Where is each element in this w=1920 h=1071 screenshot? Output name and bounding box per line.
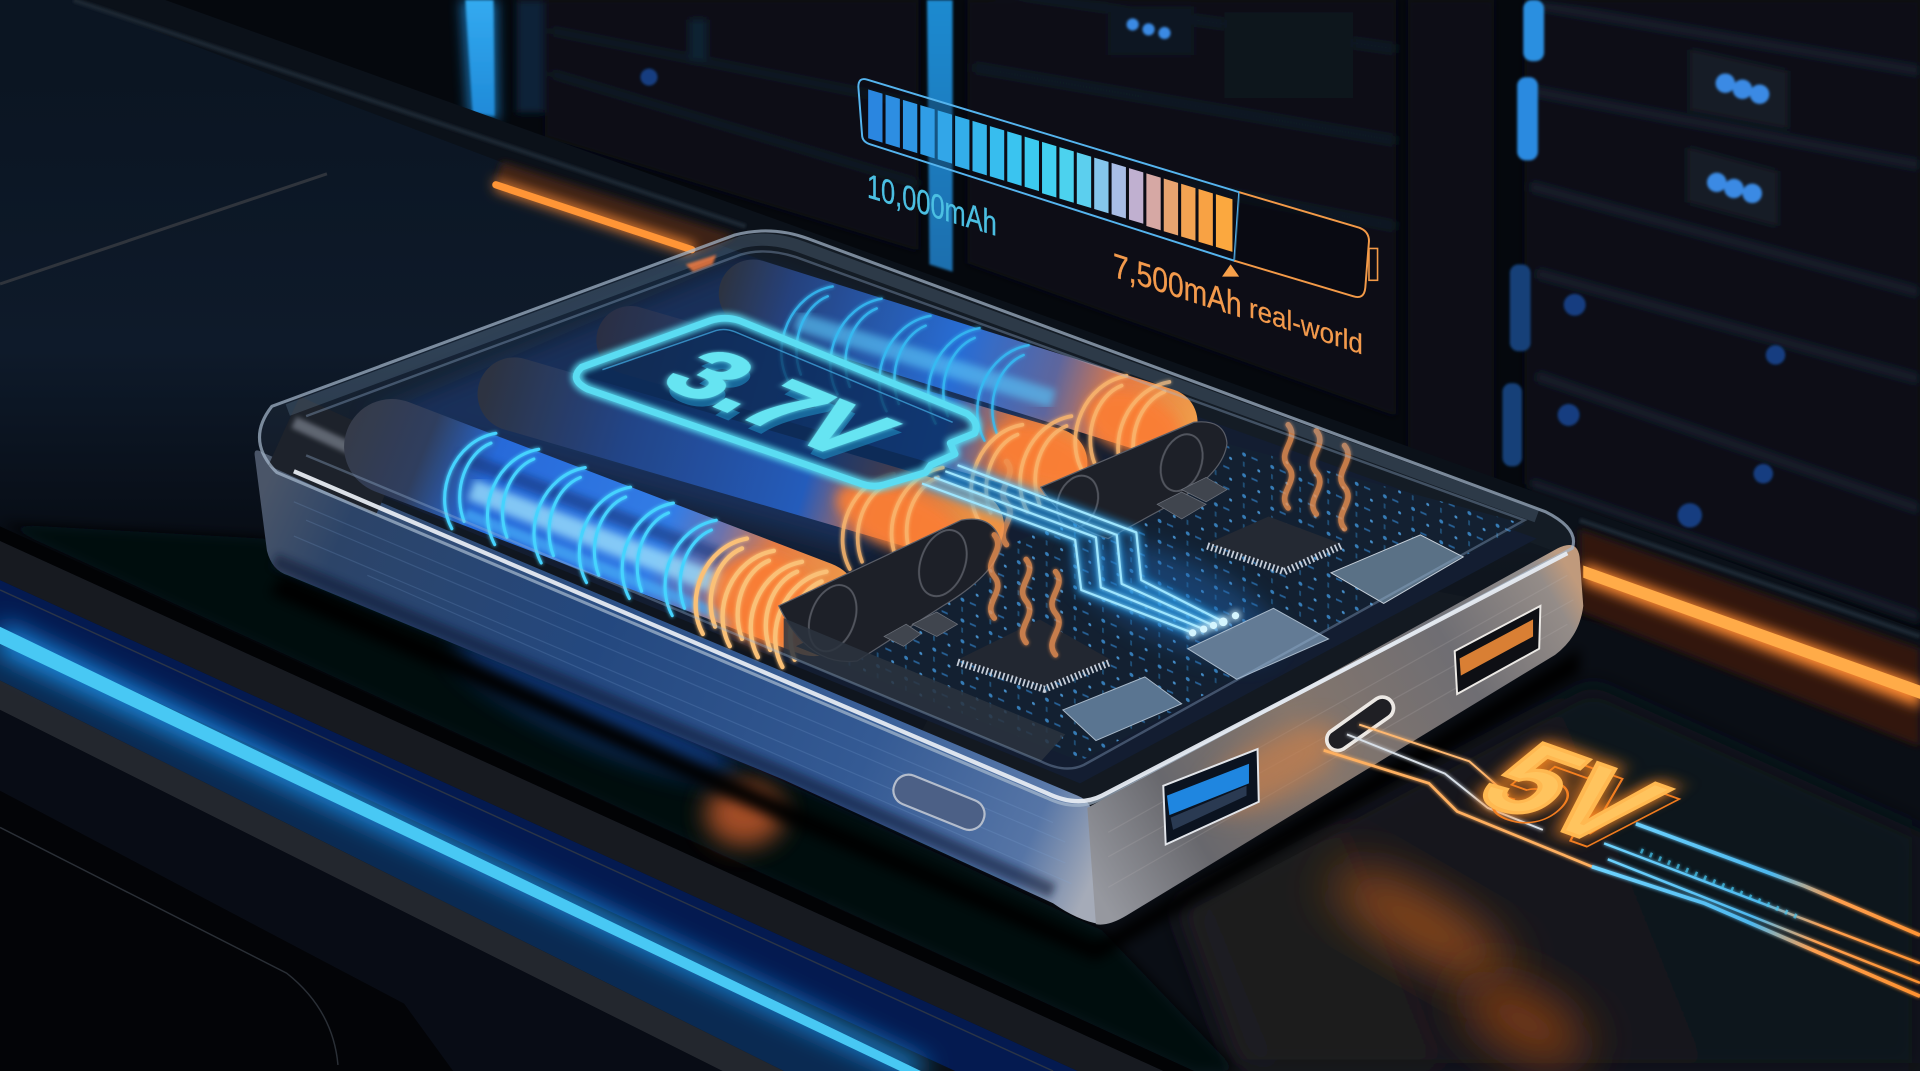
glass bright front edge xyxy=(294,471,1567,801)
interior floor xyxy=(284,255,1537,783)
neon tube: left xyxy=(460,0,498,121)
brushed metal streaks xyxy=(294,502,1071,884)
battery holder: front xyxy=(779,519,1002,662)
silver block A xyxy=(1063,677,1182,741)
gauge outline: used section xyxy=(1234,192,1369,297)
chip 1 xyxy=(958,619,1111,689)
desk rear band xyxy=(73,0,1920,685)
case shadow xyxy=(269,575,1580,961)
blue light strip: desk front xyxy=(0,622,931,1071)
desk lower navy xyxy=(0,710,722,1071)
USB-C port xyxy=(1327,697,1393,751)
bottom-left dark panel xyxy=(0,791,453,1071)
glowing circuit traces xyxy=(922,465,1223,633)
desk front deep blue band xyxy=(0,580,1078,1071)
cell 1 cyan coil rings xyxy=(445,433,716,616)
desk floor sheen xyxy=(1176,685,1920,1071)
holder end caps xyxy=(800,428,1210,658)
cells heated rings xyxy=(843,376,1169,569)
board blue glow xyxy=(1058,517,1293,683)
orange light strip: rear left xyxy=(493,179,696,255)
label: real-world: real-world xyxy=(1249,293,1363,361)
5V label: 5V xyxy=(1458,732,1700,875)
gauge cells xyxy=(868,89,1232,252)
heat waves: right cluster xyxy=(1285,425,1348,529)
badge inner line xyxy=(602,330,953,422)
server rack: centre left xyxy=(517,0,918,251)
glass thick rim band xyxy=(288,240,1537,517)
server rack: right xyxy=(1524,0,1920,624)
dark lane behind the device xyxy=(0,524,1237,1071)
5V label: 5V xyxy=(1451,722,1693,865)
desk right area xyxy=(735,514,1920,1071)
5V label: 5V xyxy=(1451,722,1693,865)
desk front black edge xyxy=(0,526,1194,1071)
label: 3.7V: 3.7V xyxy=(639,335,918,472)
battery cell 2 xyxy=(514,394,967,526)
band highlight line xyxy=(0,590,1053,1071)
bottom-left panel outline xyxy=(0,827,338,1065)
battery cell 1: front xyxy=(392,447,814,621)
power button xyxy=(889,770,989,834)
trace end nodes xyxy=(1189,612,1239,636)
silver block B xyxy=(1188,608,1329,679)
small components xyxy=(884,477,1227,646)
desk reflections xyxy=(441,619,1599,1071)
USB-A port: blue xyxy=(1163,749,1259,845)
battery cell 3 xyxy=(631,340,1053,463)
desk lower band xyxy=(0,644,900,1071)
capacity gauge xyxy=(858,79,1378,361)
cell 4 cyan coil rings xyxy=(781,286,1029,441)
power bank xyxy=(255,231,1583,961)
case side: long brushed metal face xyxy=(255,450,1100,924)
glass orange reflection xyxy=(686,255,716,272)
label: 7,500mAh: 7,500mAh xyxy=(1113,246,1242,326)
neon tube: right dim lower xyxy=(1502,383,1522,466)
gauge outline xyxy=(858,79,1239,261)
USB-A port: orange xyxy=(1455,606,1540,694)
3.7V battery badge xyxy=(576,318,976,486)
chip 2 xyxy=(1207,517,1341,572)
desk front grey band xyxy=(0,541,1163,1071)
neon tube: right dim upper xyxy=(1510,264,1531,351)
rack pillar xyxy=(1408,0,1494,539)
heat waves: left cluster xyxy=(991,461,1059,655)
gauge tip xyxy=(1369,248,1378,280)
desk panel outline xyxy=(0,174,327,284)
glass inner rim xyxy=(306,251,1524,769)
desk lower grey band xyxy=(0,681,784,1071)
output traces from USB-C to edge xyxy=(1324,725,1920,996)
port face streaks xyxy=(1108,575,1573,887)
brown glow band: rear left xyxy=(496,162,735,255)
label: 10,000mAh: 10,000mAh xyxy=(867,167,997,244)
cell 1 heated rings xyxy=(696,539,827,667)
cells heat flame xyxy=(698,379,1188,661)
rear band highlight xyxy=(73,0,1920,636)
battery holder: rear xyxy=(1041,422,1227,539)
server rack: centre right xyxy=(967,0,1396,416)
port face orange sheen xyxy=(1195,707,1352,830)
label: 3.7V shadow: 3.7V xyxy=(640,344,919,481)
side face lower shading xyxy=(274,561,1053,891)
interior blue haze xyxy=(367,263,1102,551)
brown glow band: rear right xyxy=(1580,529,1920,747)
gauge marker xyxy=(1222,264,1239,277)
orange light strip: rear right xyxy=(1583,563,1920,707)
dark rod at left corner xyxy=(284,422,392,480)
battery cell 4: rear xyxy=(753,294,1163,422)
circuit board xyxy=(796,443,1524,761)
neon tube: right upper xyxy=(1523,0,1544,61)
case side: port face xyxy=(1087,545,1583,925)
neon tube: right lower xyxy=(1517,77,1538,160)
neon tube: centre xyxy=(927,0,953,272)
rack indicator lights xyxy=(640,18,1785,528)
silver block C xyxy=(1331,535,1463,603)
glass lid xyxy=(259,231,1574,805)
circuit board front strip xyxy=(784,618,1065,761)
